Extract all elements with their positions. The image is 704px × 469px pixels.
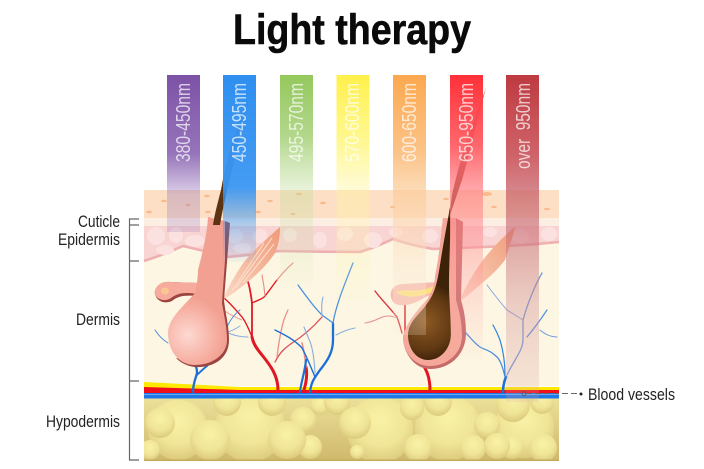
bar: 495-570nm: 495-570nm [286, 83, 308, 162]
bar: over 950nm: over 950nm [513, 83, 535, 169]
label: dermis: Dermis [76, 311, 120, 329]
hair follicle left [155, 88, 280, 367]
blood vessels callout: Blood vessels [588, 386, 675, 404]
bar: 450-495nm [223, 75, 256, 262]
bar: 380-450nm [167, 75, 200, 232]
bar: over 950nm [506, 75, 539, 402]
light band [144, 218, 559, 226]
outer shaft and bulb left shadow [176, 221, 230, 367]
follicle outer sheath right [403, 218, 466, 369]
epidermis layer [144, 226, 559, 262]
label: cuticle: Cuticle [78, 213, 120, 231]
hypodermis fat layer [144, 398, 559, 460]
hair shaft right [449, 88, 486, 218]
cuticle layer [144, 190, 559, 218]
branching veins [155, 263, 557, 392]
label: hypodermis: Hypodermis [46, 413, 120, 431]
muscle left [223, 227, 280, 299]
sebaceous gland right [391, 282, 438, 305]
muscle right [458, 227, 515, 303]
layer bracket [130, 219, 139, 460]
hair follicle right [391, 88, 515, 369]
follicle pink right [403, 218, 462, 366]
light spectrum bars [167, 75, 539, 402]
blood vessel bands [144, 382, 559, 398]
bulb and root right [408, 207, 451, 360]
title: Light therapy [233, 6, 471, 54]
sebaceous gland left [155, 282, 198, 302]
bar: 650-950nm [450, 75, 483, 360]
layer labels [46, 213, 120, 431]
fat layer bottom edge [144, 460, 559, 461]
dermis layer [144, 240, 559, 386]
bar: 600-650nm [393, 75, 426, 335]
bar: 650-950nm: 650-950nm [456, 83, 478, 162]
hair shaft left [213, 88, 252, 225]
blood vessels callout [522, 386, 675, 404]
skin cross-section [140, 88, 559, 463]
bar: 495-570nm [280, 75, 313, 285]
bar: 380-450nm: 380-450nm [173, 83, 195, 162]
label: epidermis: Epidermis [58, 231, 120, 249]
bar: 600-650nm: 600-650nm [399, 83, 421, 162]
bar: 570-600nm: 570-600nm [342, 83, 364, 162]
bar: 450-495nm: 450-495nm [229, 83, 251, 162]
bar: 570-600nm [336, 75, 370, 300]
branching arteries [223, 263, 430, 390]
follicle body left [168, 217, 227, 365]
